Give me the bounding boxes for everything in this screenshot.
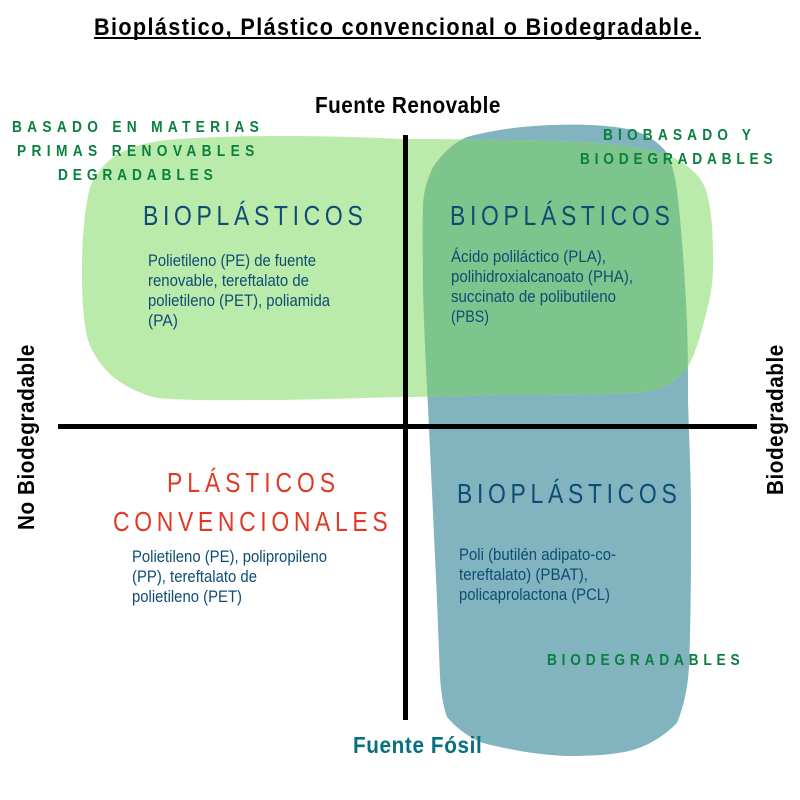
- text block: tereftalato) (PBAT),: [459, 566, 588, 584]
- label: top-right category: BIOBASADO Y: [603, 126, 751, 144]
- vertical axis: [403, 135, 408, 720]
- text block: (PA): [148, 312, 178, 330]
- axis label: bottom: Fuente Fósil: [353, 732, 482, 758]
- label: top-left category: [12, 118, 259, 184]
- heading: PLÁSTICOS: [167, 467, 335, 499]
- text block: renovable, tereftalato de: [148, 272, 309, 290]
- heading: BIOPLÁSTICOS: [450, 200, 670, 232]
- text block: Ácido poliláctico (PLA),: [451, 247, 606, 266]
- heading: CONVENCIONALES: [113, 507, 388, 538]
- text block: [148, 252, 331, 330]
- text block: [459, 546, 616, 604]
- heading: [113, 467, 388, 538]
- text block: succinato de polibutileno: [451, 288, 616, 306]
- label: bottom-right category: BIODEGRADABLES: [547, 651, 740, 669]
- axis label: left: No Biodegradable: [13, 345, 39, 530]
- text block: polihidroxialcanoato (PHA),: [451, 268, 633, 286]
- label: top-right category: BIODEGRADABLES: [580, 150, 773, 168]
- panel: top-right quadrant: [450, 200, 670, 326]
- text block: Polietileno (PE), polipropileno: [132, 548, 327, 566]
- text block: Polietileno (PE) de fuente: [148, 252, 316, 270]
- blob: biodegradable (blue): [423, 125, 691, 756]
- text block: polietileno (PET): [132, 588, 242, 606]
- panel: bottom-left quadrant: [113, 467, 388, 606]
- text block: Poli (butilén adipato-co-: [459, 546, 616, 564]
- label: top-left category: PRIMAS RENOVABLES: [17, 142, 254, 160]
- panel: top-left quadrant: [143, 200, 363, 330]
- text block: [132, 548, 327, 606]
- text block: polietileno (PET), poliamida: [148, 292, 331, 310]
- blob: overlap of both regions: [422, 139, 688, 397]
- title: Bioplástico, Plástico convencional o Biodegradable.: [94, 13, 700, 40]
- text block: (PBS): [451, 308, 489, 326]
- panel: bottom-right quadrant: [457, 478, 677, 604]
- axis label: right: Biodegradable: [762, 345, 788, 495]
- heading: BIOPLÁSTICOS: [143, 200, 363, 232]
- label: top-right category: [580, 126, 773, 168]
- axis label: top: Fuente Renovable: [315, 92, 500, 118]
- text block: policaprolactona (PCL): [459, 586, 610, 604]
- horizontal axis: [58, 424, 757, 429]
- text block: (PP), tereftalato de: [132, 568, 257, 586]
- blob: biobased (green): [82, 136, 713, 400]
- label: top-left category: BASADO EN MATERIAS: [12, 118, 259, 136]
- heading: BIOPLÁSTICOS: [457, 478, 677, 510]
- text block: [451, 247, 633, 326]
- label: top-left category: DEGRADABLES: [58, 166, 213, 184]
